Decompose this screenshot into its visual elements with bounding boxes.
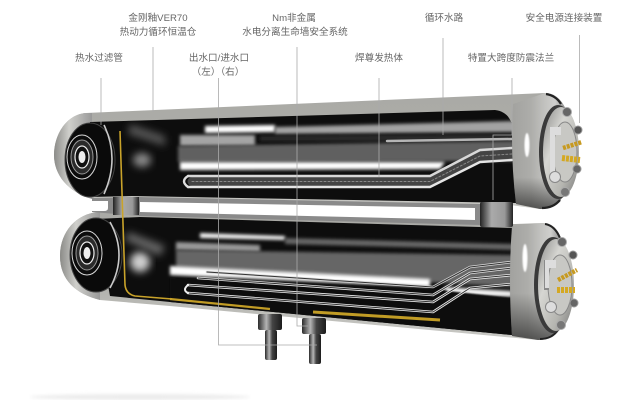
label: thermal chamber: 金刚釉VER70 — [128, 12, 188, 24]
label: thermal chamber — [120, 12, 197, 38]
label: thermal chamber: 热动力循环恒温仓 — [120, 26, 197, 38]
leader lines — [101, 35, 580, 345]
label: water ports: （左）（右） — [192, 66, 244, 78]
label: flange: 特置大跨度防震法兰 — [468, 52, 555, 64]
water heater tank illustration — [54, 93, 582, 364]
label: non-metal wall: Nm非金属 — [272, 12, 316, 24]
bottom tank shell — [60, 212, 561, 340]
bottom gold pipe — [170, 299, 270, 309]
label: power connector: 安全电源连接装置 — [526, 12, 603, 24]
bottom collar shading — [510, 223, 561, 340]
bottom collar — [510, 223, 561, 340]
top tank — [54, 93, 582, 209]
bottom right flange — [534, 237, 578, 333]
top collar shading — [512, 130, 566, 209]
label: filter pipe: 热水过滤管 — [75, 52, 123, 64]
top tank left shell — [54, 113, 92, 199]
right connector block — [480, 202, 513, 227]
bracket strip — [92, 197, 480, 225]
label: water ports: 出水口/进水口 — [189, 52, 249, 64]
bottom gold pipe segment — [313, 312, 440, 320]
label: heating element: 焊尊发热体 — [355, 52, 403, 64]
top left end cap disc — [65, 123, 115, 197]
bottom tank left shell — [60, 212, 100, 300]
label: water circuit: 循环水路 — [425, 12, 464, 24]
top collar — [512, 93, 566, 209]
bottom tank outlet ports — [258, 314, 326, 364]
bottom tank interior — [102, 217, 512, 335]
top heating coil — [184, 139, 512, 187]
top tank interior — [88, 108, 518, 208]
top collar highlight — [524, 133, 530, 157]
top tank shell — [54, 93, 566, 209]
floor shadow — [30, 394, 250, 400]
bottom tank — [60, 212, 578, 364]
label: non-metal wall: 水电分离生命墙安全系统 — [242, 26, 348, 38]
white gap — [140, 202, 475, 220]
label: non-metal wall — [242, 12, 348, 38]
top cap rim — [542, 94, 561, 208]
bottom cap rim — [540, 224, 560, 339]
bottom left end cap disc — [70, 218, 122, 292]
bottom heating coils — [185, 262, 512, 312]
bottom collar highlight — [522, 244, 528, 272]
gold filter pipe — [120, 131, 172, 299]
labels — [75, 12, 603, 78]
top right flange — [539, 105, 582, 199]
left notch — [88, 201, 108, 211]
label: water ports — [189, 52, 249, 78]
left connector block — [113, 197, 139, 215]
connector bracket between tanks — [88, 197, 513, 227]
